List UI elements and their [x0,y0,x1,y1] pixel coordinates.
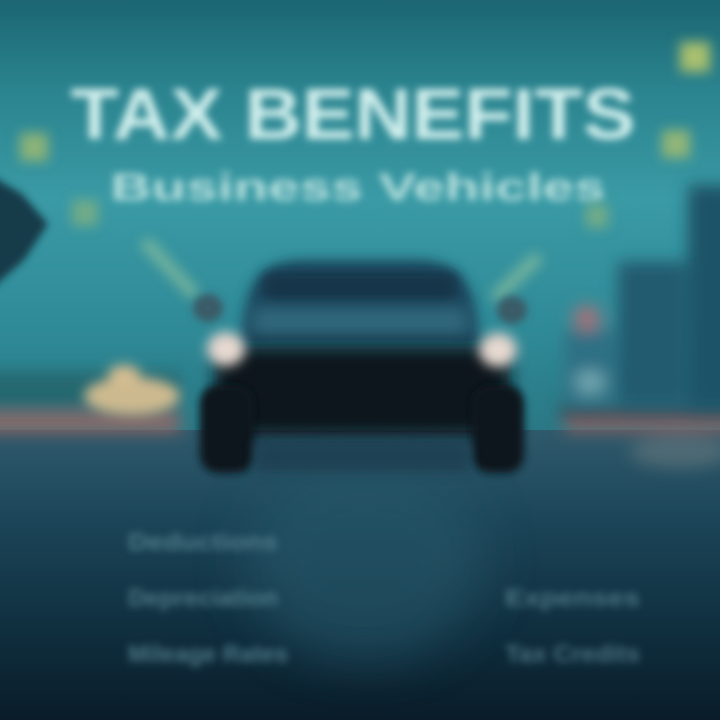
left wheel [200,385,254,473]
building: distant cream landmark [84,365,180,415]
right wheel [472,385,524,473]
left mirror [193,294,223,322]
subtitle: Business Vehicles [110,167,606,209]
text block: right column: Expenses [505,585,640,612]
icons: yellow sparkle squares [20,42,710,228]
text block: right column [505,585,640,668]
car roof and windshield [240,260,480,345]
left headlight [207,332,245,366]
text block: left column: Depreciation [128,585,278,612]
hood [252,308,468,334]
title: TAX BENEFITS [70,75,636,155]
dark arrow shape at left edge [0,175,48,290]
car body [215,346,510,436]
right headlight [479,333,517,367]
text block: left column: Mileage Rates [128,641,288,668]
right mirror [497,296,527,324]
horizon: warm shoreline [0,372,720,468]
text block: left column [128,529,288,668]
city skyline [565,185,720,410]
background: wet road [0,430,720,720]
text block: right column: Tax Credits [505,641,640,668]
text block: left column: Deductions [128,529,278,556]
background: teal sky [0,0,720,440]
windshield glare [262,272,458,302]
car shadow [255,442,470,472]
headlight beams [148,245,535,295]
car silhouette [193,260,527,473]
